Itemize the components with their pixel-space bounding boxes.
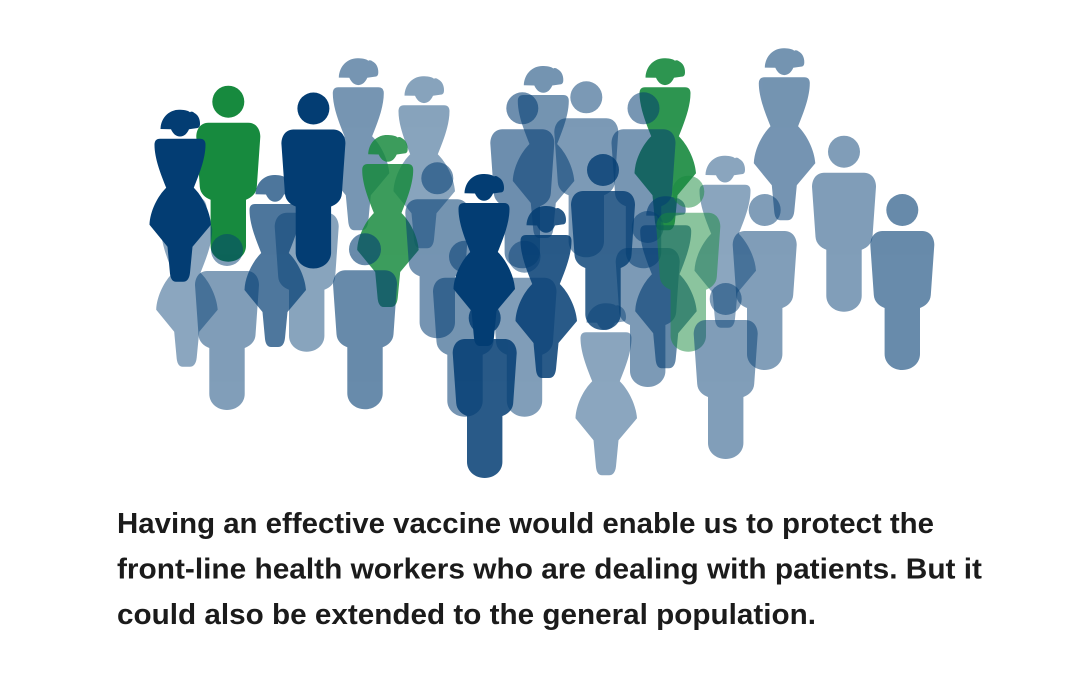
- figure: green man: [196, 86, 260, 262]
- figure: man behind navy: [275, 176, 339, 352]
- figure: man centre top: [490, 92, 554, 268]
- figure: woman mid-left: [244, 175, 306, 347]
- figure: man far right lower: [870, 194, 934, 370]
- caption text: front-line health workers who are dealing with patients. But it: [117, 554, 982, 586]
- figure: man behind front centre: [433, 241, 497, 417]
- figure: green woman left: [357, 135, 419, 307]
- figure: pale woman far left: [156, 195, 218, 367]
- back figure: woman top centre-left: [328, 58, 389, 230]
- figure: woman pale right: [694, 156, 756, 328]
- figure: man top: [554, 81, 618, 257]
- figure: man top right: [612, 92, 676, 268]
- figure: dark man front: [453, 302, 517, 478]
- figure: light green man: [656, 176, 720, 352]
- figure: navy woman left: [150, 110, 211, 282]
- figure: man bottom right: [694, 283, 758, 459]
- figure: dark man centre: [571, 154, 635, 330]
- figure: man lower-left: [333, 233, 397, 409]
- figure: green woman right: [634, 58, 696, 230]
- figure: woman pale bottom: [576, 303, 637, 475]
- figure: man far right upper: [812, 136, 876, 312]
- caption text: [117, 508, 982, 631]
- figure: dark woman centre right: [516, 206, 577, 378]
- figure: man behind right: [616, 211, 680, 387]
- figure: navy man: [281, 92, 345, 268]
- crowd of people pictogram: [150, 48, 934, 478]
- caption text: Having an effective vaccine would enable us to protect the: [117, 508, 934, 540]
- caption text: could also be extended to the general population.: [117, 599, 816, 631]
- figure: man behind front centre right: [492, 241, 556, 417]
- figure: pale man left: [195, 234, 259, 410]
- figure: woman top right: [754, 48, 815, 220]
- back figure: woman pale: [394, 76, 455, 248]
- figure: navy woman centre: [454, 174, 515, 346]
- figure: woman centre top: [513, 66, 574, 238]
- figure: woman centre right: [635, 196, 697, 368]
- figure: man centre-left: [405, 162, 469, 338]
- figure: man right centre: [733, 194, 797, 370]
